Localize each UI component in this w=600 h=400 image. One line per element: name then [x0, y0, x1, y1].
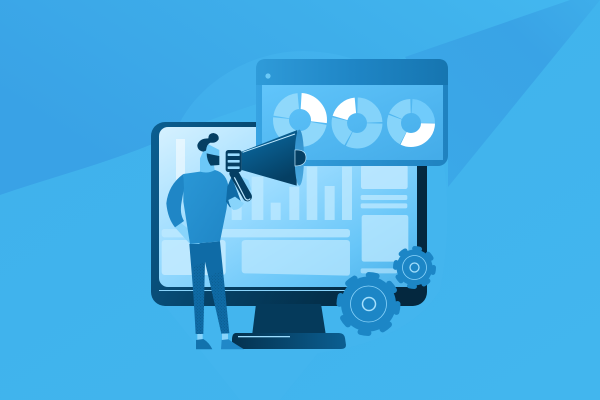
grip stripes	[228, 153, 240, 169]
frame highlight	[159, 290, 349, 291]
torso	[183, 170, 229, 244]
monitor screen	[159, 127, 417, 287]
window body	[262, 85, 443, 160]
person with megaphone	[166, 130, 306, 349]
hand on hip	[175, 223, 201, 244]
background shape: soft blob behind monitor	[160, 51, 447, 400]
window header	[256, 59, 448, 85]
beard	[207, 153, 219, 166]
widget: left card	[162, 240, 226, 275]
background shape: upper-right wedge	[405, 0, 600, 187]
megaphone cone	[242, 130, 297, 186]
screen glare bar	[176, 139, 185, 187]
left arm	[166, 174, 184, 227]
right shoe	[221, 339, 244, 349]
monitor	[151, 122, 427, 349]
donut chart 3	[394, 106, 428, 140]
left shoe	[196, 339, 212, 349]
neck and face	[200, 143, 219, 174]
monitor stand	[252, 304, 326, 336]
hair	[197, 133, 219, 152]
left leg and right leg	[189, 241, 229, 334]
hand on megaphone	[228, 197, 244, 210]
widget: list lines	[361, 195, 407, 208]
small gear	[396, 248, 434, 286]
donut chart 1	[281, 101, 319, 139]
widget: wide card	[242, 240, 350, 276]
ankles	[197, 334, 228, 340]
dashboard window	[256, 59, 448, 166]
monitor frame	[151, 122, 427, 306]
bell rim	[295, 130, 304, 186]
widget: right card	[362, 215, 408, 262]
window header dot	[265, 73, 271, 79]
widget: small line	[361, 268, 397, 273]
monitor base	[232, 333, 346, 349]
background shape: upper-left panel	[0, 0, 600, 195]
dashboard widgets	[162, 165, 408, 276]
megaphone	[226, 130, 306, 200]
bell cap	[295, 150, 306, 166]
base highlight	[238, 336, 290, 337]
cone highlight	[243, 134, 295, 152]
right arm	[226, 177, 242, 207]
megaphone grip	[226, 150, 242, 172]
bar chart	[232, 167, 352, 220]
gears	[340, 248, 434, 333]
widget: top right card	[361, 165, 408, 189]
donut chart 2	[339, 105, 375, 141]
widget: full row	[162, 229, 350, 237]
window frame	[256, 59, 448, 166]
megaphone handle	[234, 173, 247, 197]
trouser shading	[193, 262, 229, 334]
large gear	[340, 275, 398, 333]
